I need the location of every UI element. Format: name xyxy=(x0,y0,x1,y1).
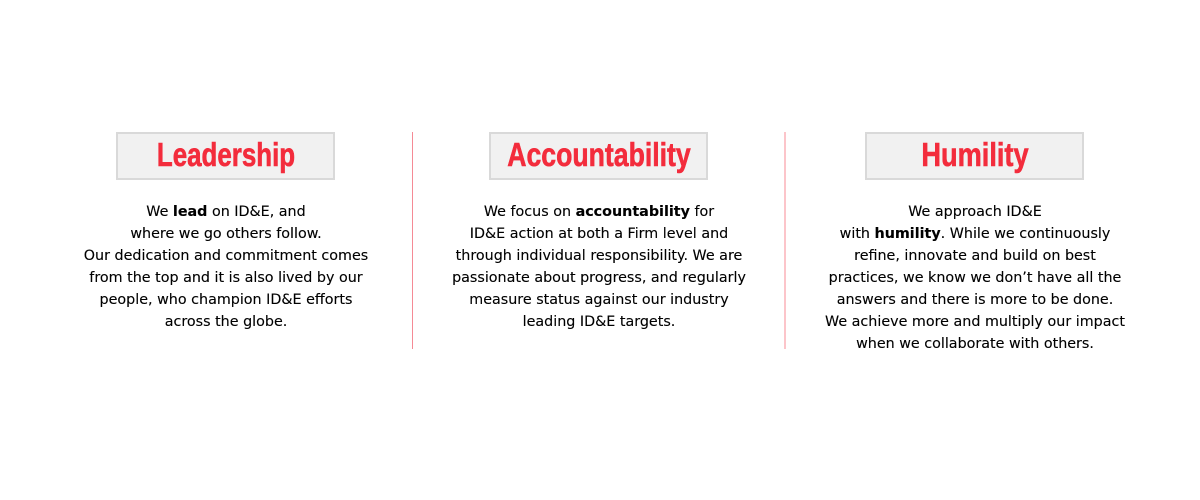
text block: leadership description: We lead on ID&E, and xyxy=(146,204,306,220)
text block: humility description: with humility. While we continuously xyxy=(840,226,1110,242)
text block: humility description: practices, we know we don’t have all the xyxy=(829,270,1121,286)
text block: leadership description: Our dedication and commitment comes xyxy=(84,248,368,264)
text block: leadership description xyxy=(84,204,368,330)
text block: leadership description: across the globe. xyxy=(165,314,287,330)
text block: accountability description: through individual responsibility. We are xyxy=(456,248,742,264)
panel: leadership xyxy=(84,132,368,330)
text block: humility description: refine, innovate and build on best xyxy=(854,248,1096,264)
divider: left xyxy=(412,132,413,349)
panel: accountability xyxy=(452,132,746,330)
text block: humility description: We approach ID&E xyxy=(908,204,1042,220)
heading: Humility: Humility xyxy=(921,136,1029,173)
text block: accountability description: ID&E action at both a Firm level and xyxy=(470,226,728,242)
text block: humility description: when we collaborate with others. xyxy=(856,336,1094,352)
text block: leadership description: from the top and it is also lived by our xyxy=(89,270,363,286)
text block: leadership description: where we go others follow. xyxy=(130,226,322,242)
text block: humility description: answers and there is more to be done. xyxy=(837,292,1113,308)
heading: Leadership xyxy=(116,132,335,180)
heading: Accountability xyxy=(489,132,708,180)
text block: humility description: We achieve more and multiply our impact xyxy=(825,314,1125,330)
text block: accountability description xyxy=(452,204,746,330)
text block: leadership description: people, who champion ID&E efforts xyxy=(100,292,352,308)
text block: accountability description: leading ID&E targets. xyxy=(523,314,675,330)
divider: right xyxy=(784,132,786,349)
panel: humility xyxy=(825,132,1125,352)
text block: humility description xyxy=(825,204,1125,352)
text block: accountability description: We focus on accountability for xyxy=(484,204,714,220)
heading: Humility xyxy=(865,132,1084,180)
text block: accountability description: passionate about progress, and regularly xyxy=(452,270,746,286)
text block: accountability description: measure status against our industry xyxy=(469,292,729,308)
heading: Leadership: Leadership xyxy=(157,136,295,173)
heading: Accountability: Accountability xyxy=(507,136,691,173)
